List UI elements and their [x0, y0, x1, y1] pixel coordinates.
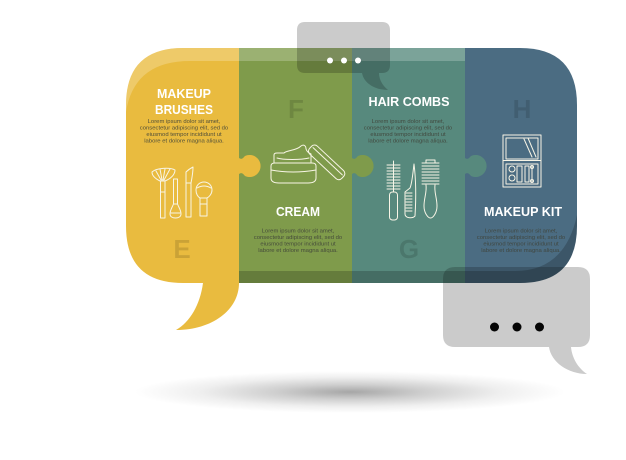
text: makeup brushes body: eiusmod tempor incididunt ut: [146, 132, 222, 138]
text: makeup brushes body: Lorem ipsum dolor sit amet,: [148, 119, 221, 125]
connector knob: teal: [465, 155, 487, 177]
text: makeup kit body: eiusmod tempor incididunt ut: [483, 242, 559, 248]
letter E: E: [173, 234, 191, 264]
letter F: F: [288, 94, 304, 124]
letter G: G: [399, 234, 419, 264]
speech bubble: bottom grey: [443, 267, 590, 374]
text: hair combs body: eiusmod tempor incididunt ut: [370, 132, 446, 138]
heading: makeup brushes: [155, 86, 213, 117]
icon: makeup palette: [503, 135, 541, 187]
icon: cream jar: [271, 143, 346, 183]
heading: makeup kit: MAKEUP KIT: [484, 204, 562, 219]
text: hair combs body: labore et dolore magna aliqua.: [368, 138, 448, 144]
panel: hair combs (teal): [352, 48, 487, 283]
dots: top bubble: [327, 58, 361, 64]
heading: hair combs: HAIR COMBS: [368, 94, 450, 109]
connector knob: green: [352, 155, 374, 177]
heading: cream: CREAM: [276, 204, 320, 219]
panel: makeup kit (blue): [465, 48, 577, 283]
text: makeup brushes body: consectetur adipiscing elit, sed do: [140, 126, 229, 132]
text: hair combs body: Lorem ipsum dolor sit amet,: [372, 119, 445, 125]
text: hair combs body: [364, 119, 453, 144]
text: cream body: consectetur adipiscing elit, sed do: [254, 235, 343, 241]
text: makeup kit body: consectetur adipiscing elit, sed do: [477, 235, 566, 241]
speech bubble: top grey: [297, 22, 390, 90]
panel: makeup brushes (yellow speech bubble): [126, 48, 261, 330]
text: cream body: labore et dolore magna aliqua.: [258, 248, 338, 254]
panel: cream (green): [239, 48, 374, 283]
text: cream body: [254, 228, 343, 254]
text: makeup brushes body: [140, 119, 229, 144]
text: makeup brushes body: labore et dolore magna aliqua.: [144, 138, 224, 144]
text: cream body: eiusmod tempor incididunt ut: [260, 242, 336, 248]
connector knob: yellow: [239, 155, 261, 177]
heading: makeup brushes: BRUSHES: [155, 102, 213, 117]
text: makeup kit body: Lorem ipsum dolor sit amet,: [485, 228, 558, 234]
text: makeup kit body: [477, 228, 566, 254]
icon: makeup brushes: [152, 167, 212, 218]
letter H: H: [513, 94, 531, 124]
heading: makeup brushes: MAKEUP: [157, 86, 211, 101]
ground shadow: [135, 371, 565, 413]
text: hair combs body: consectetur adipiscing elit, sed do: [364, 126, 453, 132]
text: cream body: Lorem ipsum dolor sit amet,: [262, 228, 335, 234]
dots: bottom bubble: [490, 322, 544, 332]
icon: hair combs: [387, 160, 439, 220]
text: makeup kit body: labore et dolore magna aliqua.: [481, 248, 561, 254]
